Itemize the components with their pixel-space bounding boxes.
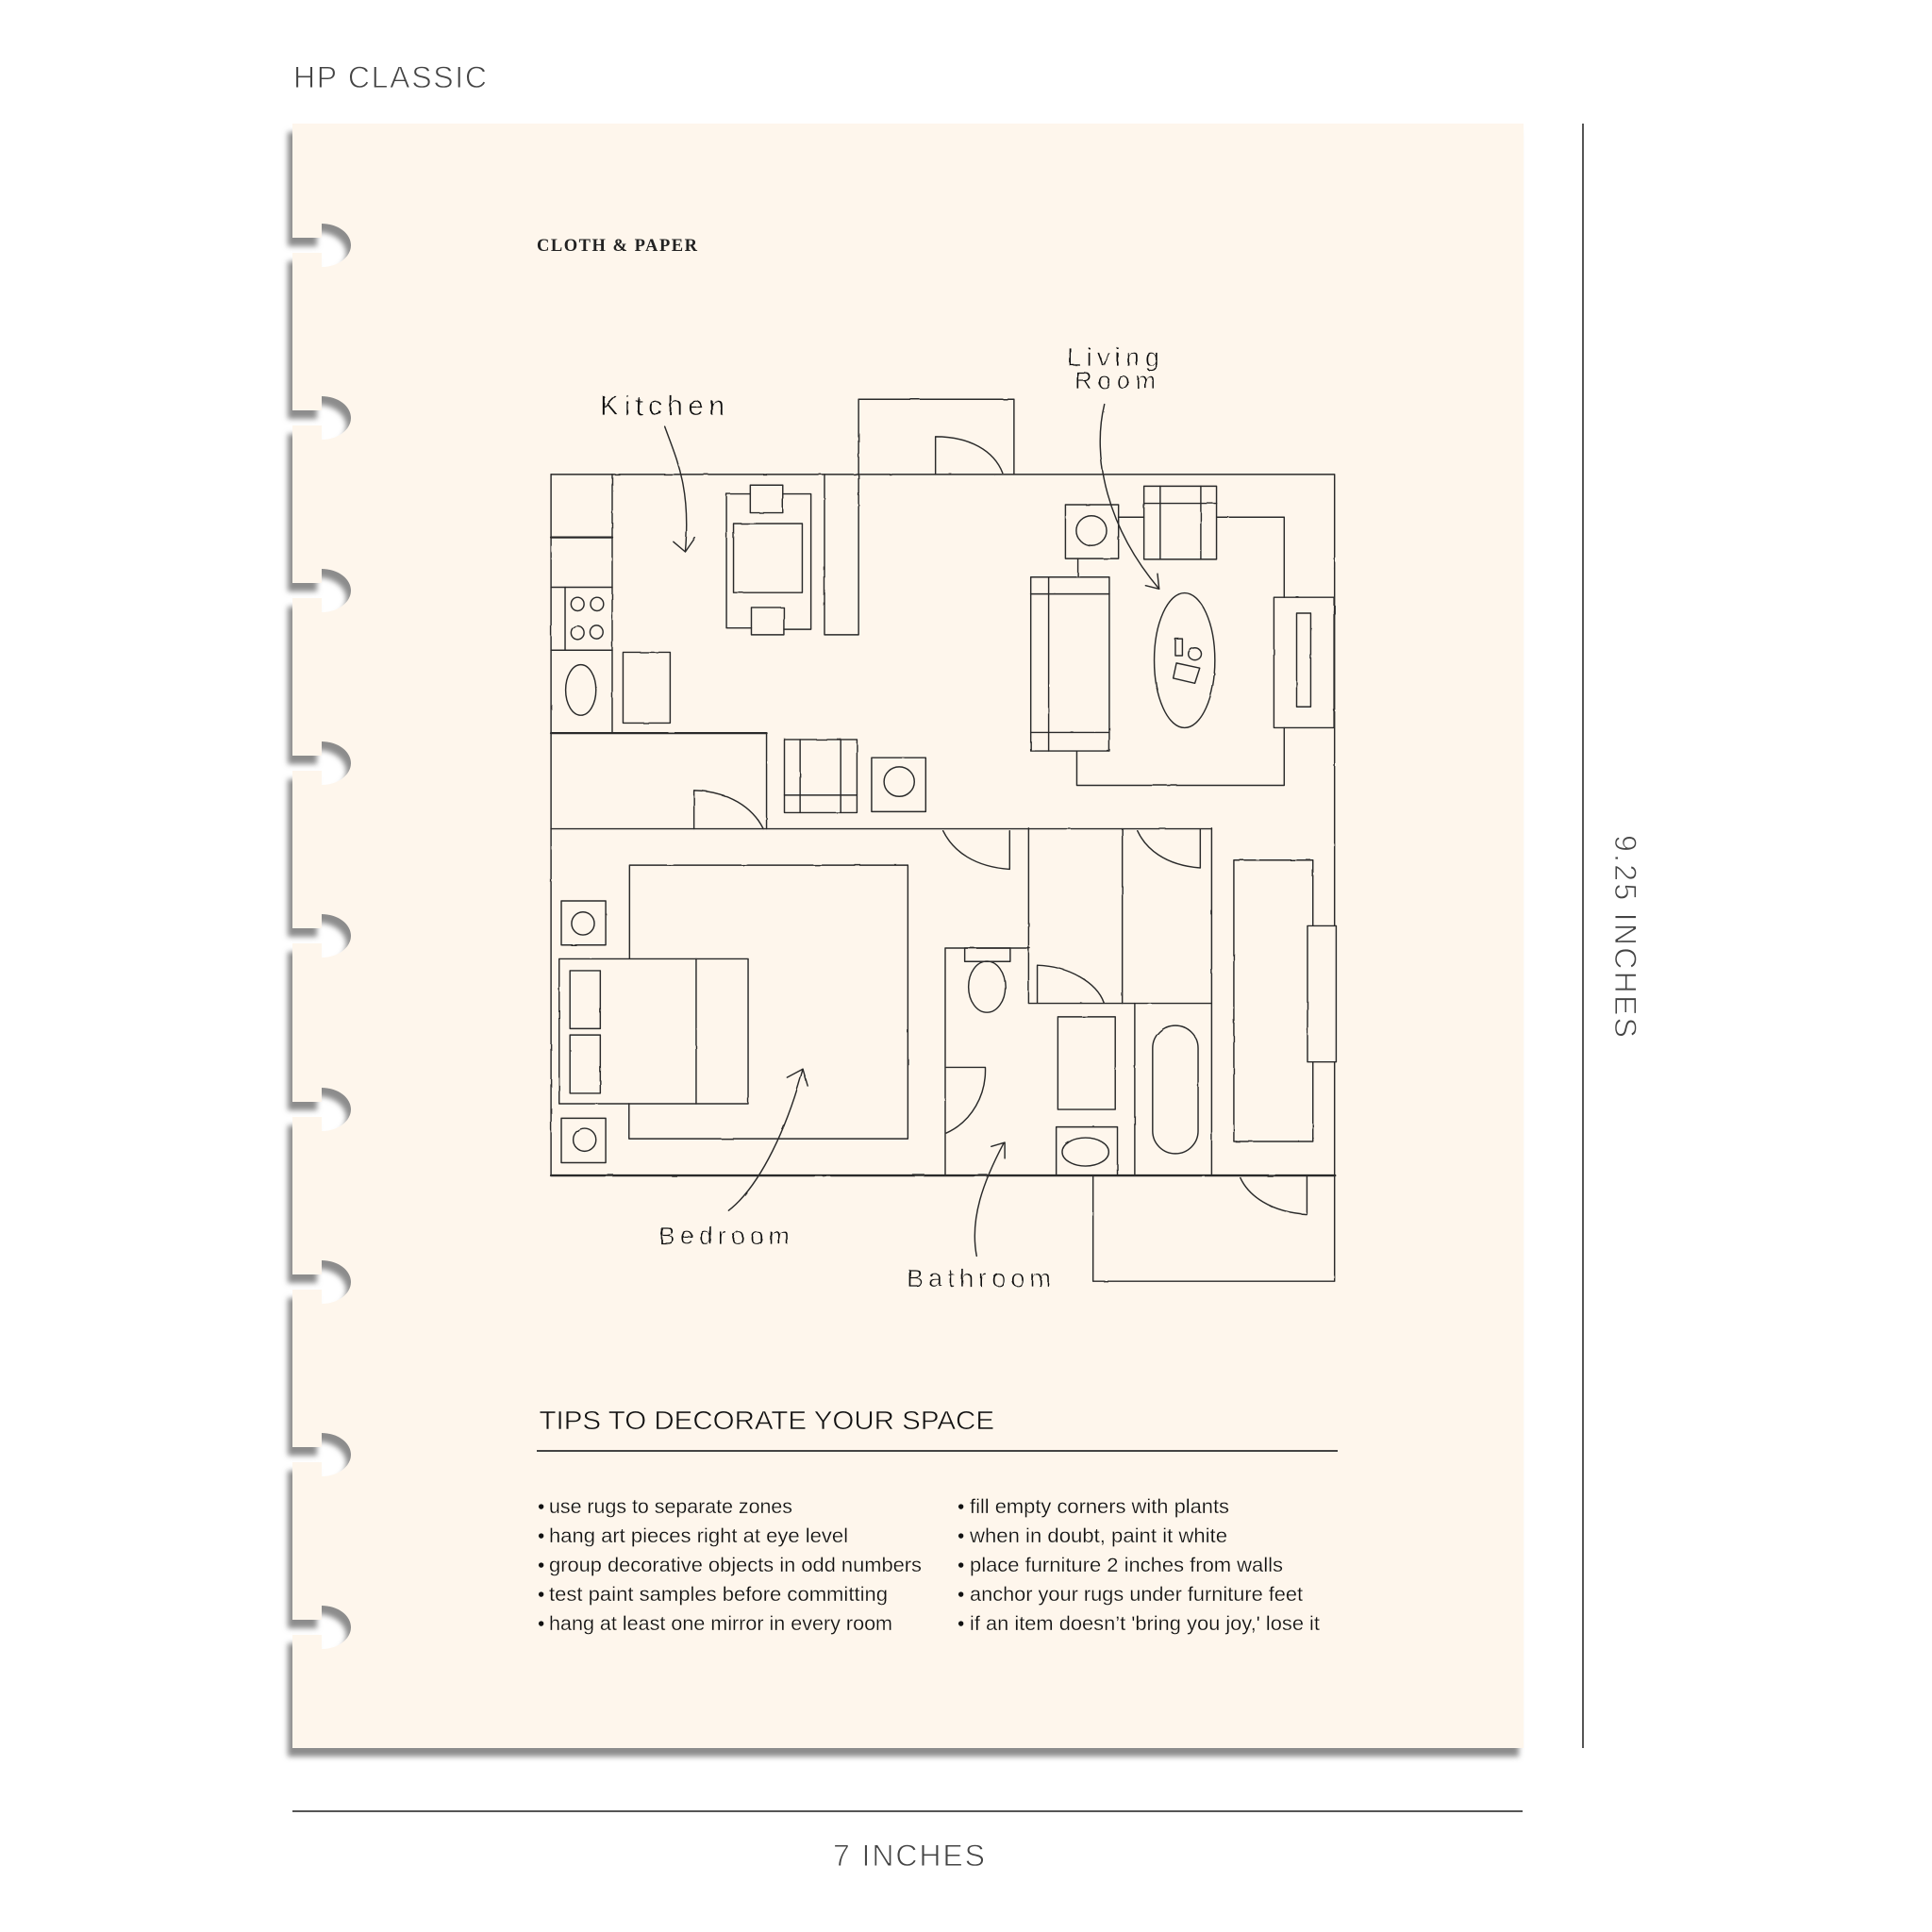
floor plan drawing — [551, 399, 1336, 1281]
entry porch — [858, 399, 1014, 475]
tips list: right column: when in doubt, paint it white — [969, 1525, 1227, 1547]
tips list: right column: fill empty corners with plants — [970, 1496, 1229, 1518]
planner page with disc-bound notches — [292, 124, 1524, 1748]
label: Bedroom: Bedroom — [658, 1222, 790, 1250]
nightstands — [561, 901, 606, 1162]
toilet — [965, 948, 1010, 1012]
tips list: right column: place furniture 2 inches from walls — [970, 1555, 1283, 1576]
tips list: left column — [538, 1496, 922, 1635]
bed with pillows — [559, 958, 748, 1104]
tips list: right column: if an item doesn’t 'bring you joy,' lose it — [970, 1613, 1320, 1635]
tips list: right column: • — [958, 1525, 964, 1547]
tips list: left column: • — [538, 1496, 544, 1518]
label: Living Room: Room — [1074, 366, 1156, 394]
arrow: bathroom — [974, 1142, 1005, 1256]
dimension label: 9.25 inches: 9.25 INCHES — [1608, 835, 1642, 1038]
tips list: right column: • — [958, 1555, 964, 1576]
handwritten room labels — [600, 342, 1159, 1292]
tips list: left column: test paint samples before committing — [549, 1584, 888, 1606]
arrow: kitchen — [665, 426, 695, 552]
dining table and chairs — [726, 485, 811, 635]
tips list: right column: • — [958, 1584, 964, 1606]
heading: tips: TIPS TO DECORATE YOUR SPACE — [540, 1406, 994, 1435]
living room armchair — [1144, 486, 1217, 559]
brand: Cloth & Paper: CLOTH & PAPER — [537, 237, 698, 256]
arrow: bedroom — [728, 1069, 808, 1210]
doors — [694, 437, 1307, 1214]
tips list: left column: • — [538, 1613, 544, 1635]
label: Living Room: Living — [1067, 342, 1159, 372]
balcony — [1093, 1175, 1335, 1281]
heavy wall lines — [551, 538, 1335, 1175]
tips list: left column: group decorative objects in odd numbers — [549, 1555, 922, 1576]
tips list: left column: hang at least one mirror in every room — [549, 1613, 892, 1635]
tips list: left column: use rugs to separate zones — [549, 1496, 792, 1518]
tips list: left column: • — [538, 1555, 544, 1576]
kitchen cabinets and stove — [551, 475, 670, 732]
walls — [551, 475, 1335, 1175]
tips list: right column: anchor your rugs under furniture feet — [970, 1584, 1303, 1606]
dimension: height line — [1582, 124, 1584, 1748]
tips list: left column: hang art pieces right at eye level — [549, 1525, 848, 1547]
sofa — [1031, 577, 1109, 751]
tips list: left column: • — [538, 1584, 544, 1606]
tips list: left column: • — [538, 1525, 544, 1547]
dimension: width line — [292, 1810, 1523, 1812]
label: Bathroom: Bathroom — [907, 1264, 1051, 1292]
coffee table with objects — [1155, 593, 1215, 727]
living room side table — [1065, 505, 1119, 558]
tips list: right column: • — [958, 1496, 964, 1518]
title: HP Classic: HP CLASSIC — [293, 60, 487, 94]
tips list: right column: • — [958, 1613, 964, 1635]
media console — [1274, 597, 1334, 727]
second armchair and side table — [785, 740, 925, 812]
bedroom rug — [629, 865, 908, 1139]
label: Living Room — [1067, 342, 1159, 394]
bathroom counter, sink and tub — [1057, 1017, 1198, 1175]
living room rug — [1076, 517, 1284, 785]
label: Kitchen: Kitchen — [600, 391, 724, 422]
dimension label: 7 inches: 7 INCHES — [833, 1839, 985, 1873]
wardrobe — [1234, 860, 1336, 1141]
tips list: right column — [958, 1496, 1320, 1635]
arrow: living room — [1100, 405, 1159, 589]
